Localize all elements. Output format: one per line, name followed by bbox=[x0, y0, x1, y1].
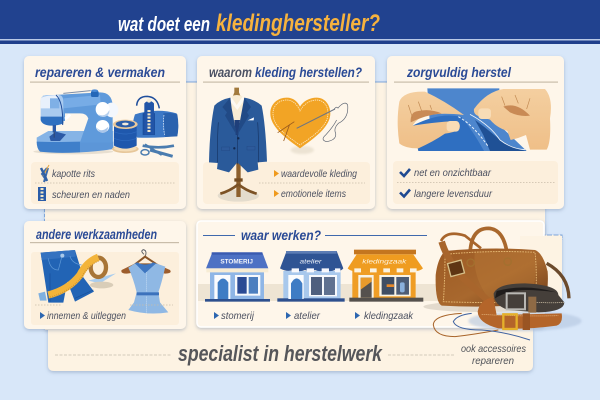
icon: suit on mannequin bbox=[209, 88, 267, 202]
panel: waar werken? bbox=[197, 221, 562, 327]
panel: repareren & vermaken bbox=[24, 56, 186, 209]
icon: arrow bbox=[214, 312, 219, 319]
icon: shop atelier bbox=[277, 251, 345, 302]
icon: check bbox=[400, 190, 410, 196]
list: repair items bbox=[31, 162, 179, 204]
list: results: net en onzichtbaar bbox=[414, 167, 491, 179]
list: repair items: scheuren en naden bbox=[52, 189, 130, 201]
bag strap back bbox=[547, 263, 569, 298]
cream backdrop bbox=[44, 82, 562, 371]
title: wat doet een bbox=[118, 14, 210, 36]
floor band bbox=[198, 284, 448, 301]
bottom banner text bbox=[55, 341, 527, 367]
text: ook accessoires repareren: repareren bbox=[472, 355, 514, 367]
icon: arrow bbox=[40, 312, 45, 319]
list: reasons bbox=[259, 168, 365, 200]
tan belt bbox=[478, 298, 562, 329]
icon: broken zipper bbox=[41, 165, 49, 182]
dark belt bbox=[494, 283, 564, 312]
heading: waar werken?: waar werken? bbox=[241, 227, 321, 243]
icon: check bbox=[400, 169, 410, 176]
icon: arrow bbox=[274, 170, 279, 177]
bag body bbox=[436, 249, 548, 307]
text: ook accessoires repareren bbox=[461, 343, 527, 367]
list: workplaces: atelier bbox=[294, 310, 320, 322]
icon: fabric with zipper bbox=[133, 96, 178, 138]
illustration: hands stitching fabric bbox=[398, 88, 551, 151]
heading: repareren & vermaken: repareren & vermaken bbox=[35, 64, 165, 80]
heading: waarom kleding herstellen?: kleding herstellen? bbox=[255, 64, 362, 80]
icon: shop kledingzaak bbox=[348, 250, 423, 302]
text: ook accessoires repareren: ook accessoires bbox=[461, 343, 527, 355]
title bbox=[118, 10, 380, 37]
panel: andere werkzaamheden bbox=[24, 221, 186, 329]
heading: zorgvuldig herstel: zorgvuldig herstel bbox=[406, 64, 512, 80]
list: results: langere levensduur bbox=[414, 188, 492, 200]
list: results bbox=[393, 161, 558, 204]
list: repair items: kapotte rits bbox=[52, 168, 96, 180]
panel: waarom kleding herstellen? bbox=[197, 56, 375, 209]
heading: specialist in herstelwerk: specialist in herstelwerk bbox=[178, 341, 383, 366]
icon: jeans with tape measure bbox=[38, 250, 116, 303]
icon: shop kledingzaak: kledingzaak bbox=[362, 259, 407, 266]
icon: shop stomerij bbox=[205, 252, 270, 302]
title: kledinghersteller? bbox=[216, 10, 380, 37]
icon: arrow bbox=[274, 190, 279, 197]
bag handles bbox=[470, 228, 508, 258]
list background bbox=[203, 162, 370, 204]
icon: shop stomerij: STOMERIJ bbox=[220, 259, 253, 266]
list: other work bbox=[35, 305, 173, 322]
icon: blouse on hanger bbox=[121, 250, 171, 314]
icon: thread spool bbox=[112, 120, 139, 153]
list: other work: innemen & uitleggen bbox=[47, 310, 126, 322]
list: reasons: waardevolle kleding bbox=[281, 168, 357, 180]
header banner bbox=[0, 0, 600, 44]
heading: andere werkzaamheden: andere werkzaamheden bbox=[36, 226, 157, 242]
panel: zorgvuldig herstel bbox=[387, 56, 564, 209]
icon: arrow bbox=[355, 312, 360, 319]
icon: leather bag and belts bbox=[423, 228, 582, 340]
list: workplaces: stomerij bbox=[221, 310, 255, 322]
icon: scissors bbox=[141, 144, 174, 156]
icon: stitched heart with needle bbox=[270, 98, 348, 154]
heading: waarom kleding herstellen? bbox=[209, 64, 362, 80]
heading: waarom kleding herstellen?: waarom bbox=[209, 64, 252, 80]
icon: sewing machine bbox=[33, 89, 118, 154]
icon: seam bbox=[38, 187, 46, 201]
bag strap front bbox=[441, 234, 481, 248]
icon: shop atelier: atelier bbox=[300, 258, 323, 265]
list: reasons: emotionele items bbox=[281, 188, 347, 200]
icon: arrow bbox=[286, 312, 291, 319]
list: workplaces: kledingzaak bbox=[364, 310, 414, 322]
list: workplaces bbox=[214, 310, 414, 322]
